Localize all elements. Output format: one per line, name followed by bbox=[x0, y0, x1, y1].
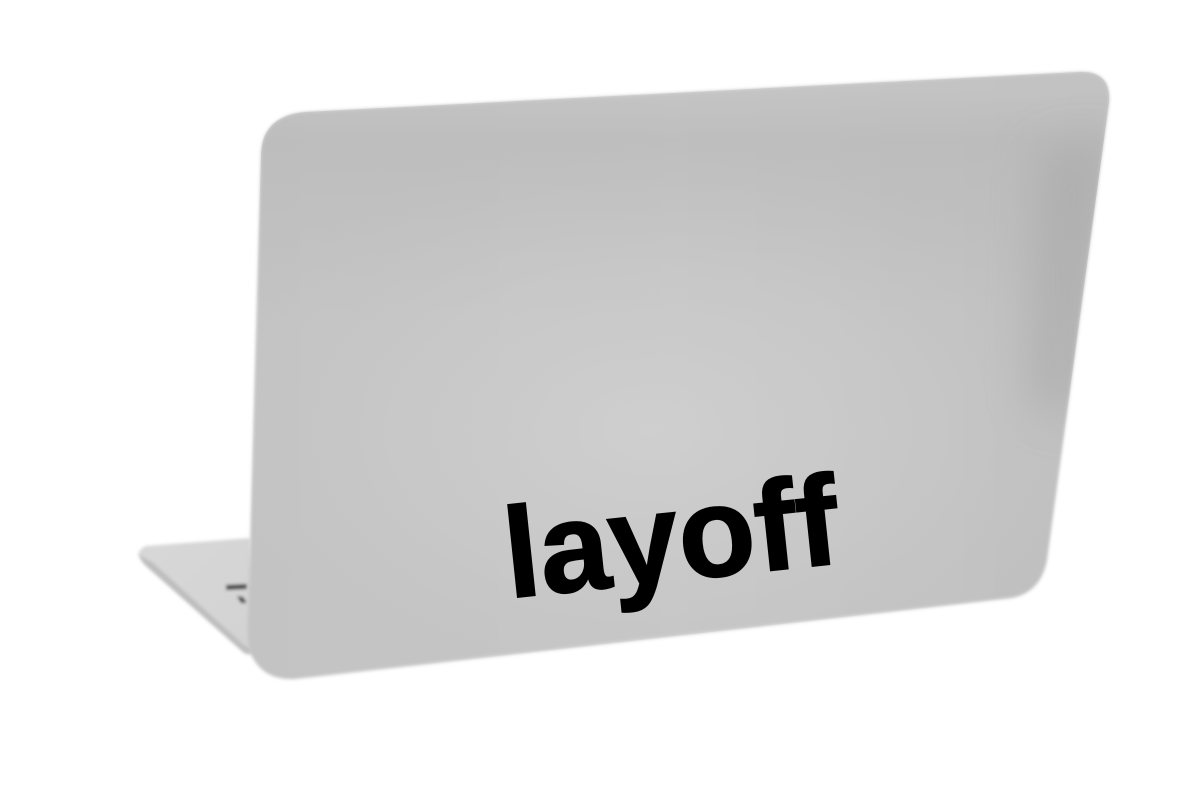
laptop base / keyboard deck bbox=[138, 538, 255, 655]
hinge vents bbox=[226, 584, 247, 603]
illustration: laptop seen from behind bbox=[137, 70, 1111, 681]
laptop lid bbox=[240, 60, 1120, 690]
label: layoff: layoff bbox=[497, 449, 845, 626]
